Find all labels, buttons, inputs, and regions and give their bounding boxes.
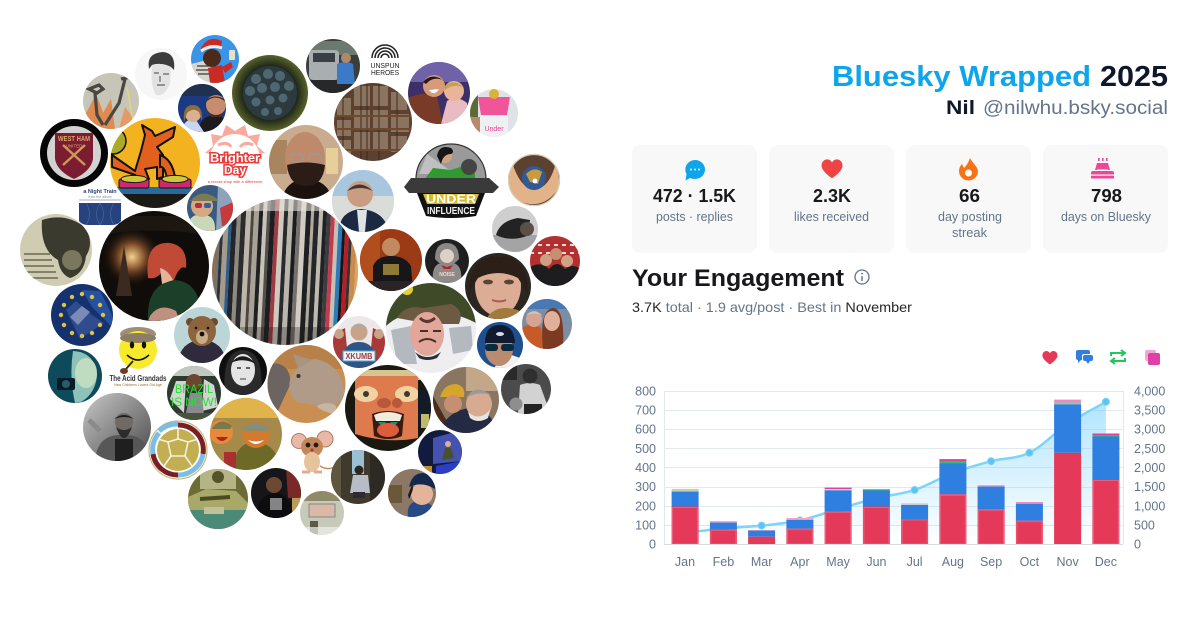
month labels: Nov [1056, 555, 1079, 569]
stat card: streak [906, 145, 1031, 253]
bar: Feb [710, 521, 737, 544]
avatar: West Ham crest [40, 119, 108, 187]
stat value: 472 · 1.5K [653, 186, 736, 206]
header [832, 61, 1168, 119]
icon: info [855, 270, 869, 284]
bar: Oct [1016, 502, 1043, 544]
gridlines [664, 391, 1124, 544]
left axis labels: 300 [635, 480, 656, 494]
avatar: KUMB: XKUMB [346, 352, 373, 361]
right axis labels [1134, 384, 1165, 552]
avatar: green car photo [188, 469, 248, 529]
title: Bluesky Wrapped [832, 61, 1091, 93]
avatar: dark sphere [232, 55, 308, 131]
avatar: spires artwork [83, 73, 139, 129]
avatar: group against red wall [530, 236, 580, 286]
avatar: Brighter Day logo [205, 125, 265, 184]
avatar: teal selfie [48, 349, 102, 403]
avatar: Unspun Heroes logo: HEROES [371, 70, 399, 77]
avatar: Under Influence logo [404, 144, 499, 218]
avatar: couple selfie [433, 367, 499, 433]
bar: Jul [901, 503, 928, 544]
avatar: santa [191, 35, 239, 83]
avatar: man in suit [332, 170, 394, 232]
avatar: pink hat: Under [484, 126, 504, 133]
avatar: EU flag [51, 284, 113, 346]
bar: Apr [786, 518, 813, 544]
avatar: Brazil is now: BRAZIL [175, 382, 213, 396]
avatar: Brazil is now [167, 366, 221, 420]
icon: flame [959, 158, 978, 180]
chart legend icons [1042, 350, 1160, 365]
avatar: upside-down selfie [386, 283, 476, 373]
avatar: Unspun Heroes logo [370, 45, 400, 77]
bar: Sep [978, 485, 1005, 544]
avatar: a Night Train sign [79, 189, 121, 225]
month labels [675, 555, 1117, 569]
user name and handle: @nilwhu.bsky.social [983, 98, 1168, 119]
icon: cake [1091, 158, 1114, 178]
left axis labels [635, 384, 656, 552]
avatar: cat [268, 345, 346, 423]
left axis labels: 600 [635, 422, 656, 436]
month labels: Jul [907, 555, 923, 569]
right axis labels: 1,000 [1134, 500, 1165, 514]
avatar: presentation screen [300, 491, 344, 535]
avatar: bear in sweater [174, 307, 230, 363]
avatar: stage screen [418, 430, 462, 474]
avatar: woman with red hair [99, 211, 209, 321]
stat label: posts · replies [656, 210, 733, 224]
stat card: likes [769, 145, 894, 253]
right axis labels: 4,000 [1134, 384, 1165, 398]
avatar: pink hat [470, 89, 518, 137]
month labels: Dec [1095, 555, 1117, 569]
avatar: vinyl records large [212, 199, 358, 345]
avatar: West Ham crest: UNITED [66, 144, 83, 148]
icon: heart [822, 159, 843, 178]
left axis labels: 100 [635, 518, 656, 532]
month labels: Jan [675, 555, 695, 569]
bar: Jan [672, 489, 699, 544]
left axis labels: 0 [649, 538, 656, 552]
avatar: man with sunglasses [187, 185, 233, 231]
left axis labels: 500 [635, 442, 656, 456]
left axis labels: 400 [635, 461, 656, 475]
icon: speech bubble [685, 160, 705, 180]
stat label: days on Bluesky [1061, 210, 1152, 224]
icon: quotes [1145, 350, 1160, 365]
avatar: engraving [20, 214, 92, 286]
right axis labels: 3,000 [1134, 422, 1165, 436]
stat label second line: streak [952, 226, 988, 240]
bar: May [825, 488, 852, 544]
avatar: The Acid Grandads: New Childrens Lovers Old Age [114, 383, 162, 387]
avatar: Brighter Day logo: Day [224, 163, 246, 177]
avatar: Brighter Day logo: a record shop with a difference [208, 179, 263, 184]
avatar: a Night Train sign: a Night Train [83, 189, 117, 195]
stat card: posts and replies [632, 145, 757, 253]
title: 2025 [1100, 61, 1168, 93]
left axis labels: 200 [635, 500, 656, 514]
avatar: King Crimson cover [345, 365, 431, 451]
stat label: likes received [794, 210, 869, 224]
avatar: man in black t-shirt [251, 468, 301, 518]
stat value: 66 [959, 186, 980, 206]
avatar: man with cap [477, 322, 523, 368]
avatar: DJ in red room [360, 229, 422, 291]
month labels: Mar [751, 555, 772, 569]
right axis labels: 2,500 [1134, 442, 1165, 456]
user name and handle: Nil [946, 98, 975, 119]
right axis labels: 500 [1134, 518, 1155, 532]
right axis labels: 2,000 [1134, 461, 1165, 475]
avatar: man in white shirt [501, 364, 551, 414]
avatar: alley [331, 450, 385, 504]
avatar: KUMB [333, 316, 385, 368]
stat value: 798 [1091, 186, 1122, 206]
cumulative line [685, 398, 1109, 533]
bar: Aug [939, 459, 966, 544]
avatar: party selfie [408, 62, 470, 124]
icon: likes [1042, 351, 1057, 365]
right axis labels: 0 [1134, 538, 1141, 552]
avatar: The Acid Grandads [110, 327, 167, 387]
avatar: woman close-up [465, 253, 531, 319]
avatar: The Acid Grandads: The Acid Grandads [110, 374, 167, 383]
month labels: Aug [942, 555, 964, 569]
avatar: bald man [269, 125, 343, 199]
avatar: Keith Haring dog [100, 118, 200, 208]
stat card: days on Bluesky [1043, 145, 1168, 253]
heading: Your Engagement: Your Engagement [632, 265, 844, 292]
avatar: black and white hat [492, 206, 538, 252]
avatar: cartoon puppets [209, 398, 282, 470]
left axis labels: 700 [635, 404, 656, 418]
avatar: record shelves [334, 83, 412, 161]
avatar: woman in hat [388, 469, 436, 517]
month labels: Sep [980, 555, 1002, 569]
chart: monthly engagement [635, 384, 1165, 569]
month labels: Oct [1020, 555, 1040, 569]
stacked bars [672, 400, 1119, 544]
avatar: Under Influence logo: INFLUENCE [427, 206, 475, 217]
avatar: Unspun Heroes logo: UNSPUN [370, 63, 400, 70]
avatar: hooded figure: NOISE [439, 272, 455, 278]
avatar: Under Influence logo: UNDER [426, 192, 476, 206]
icon: reposts [1111, 350, 1125, 364]
stat label: day posting [938, 210, 1002, 224]
avatar: couple outdoors [522, 299, 572, 349]
avatar: globe in hands [508, 154, 560, 206]
month labels: Feb [713, 555, 734, 569]
stat value: 2.3K [813, 186, 851, 206]
left axis labels: 800 [635, 384, 656, 398]
avatar: grey man [83, 393, 151, 461]
avatar: West Ham crest: WEST HAM [58, 136, 90, 143]
avatar: sketch portrait [148, 52, 174, 96]
avatar cloud panel [20, 35, 580, 535]
icon: replies [1076, 350, 1093, 364]
avatar: Brighter Day logo: Brighter [210, 151, 260, 165]
avatar: football badge [149, 421, 207, 479]
engagement summary: 3.7K total · 1.9 avg/post · Best in November [632, 299, 912, 315]
avatar: cartoon mouse [292, 431, 338, 472]
avatar: Brazil is now: IS NOW! [171, 395, 217, 409]
avatar: black and white woman [219, 347, 267, 395]
right axis labels: 3,500 [1134, 404, 1165, 418]
avatar: a Night Train sign: from the album [88, 195, 112, 199]
cumulative area [685, 402, 1106, 544]
avatar: hooded figure [425, 239, 469, 283]
bar: Mar [748, 530, 775, 544]
month labels: Jun [866, 555, 887, 569]
avatar: couple at stadium [178, 84, 228, 132]
bar: Nov [1054, 400, 1081, 544]
avatar: man with truck [306, 39, 360, 93]
bar: Jun [863, 489, 890, 544]
bar: Dec [1092, 434, 1119, 544]
month labels: May [826, 555, 851, 569]
month labels: Apr [790, 555, 810, 569]
right axis labels: 1,500 [1134, 480, 1165, 494]
